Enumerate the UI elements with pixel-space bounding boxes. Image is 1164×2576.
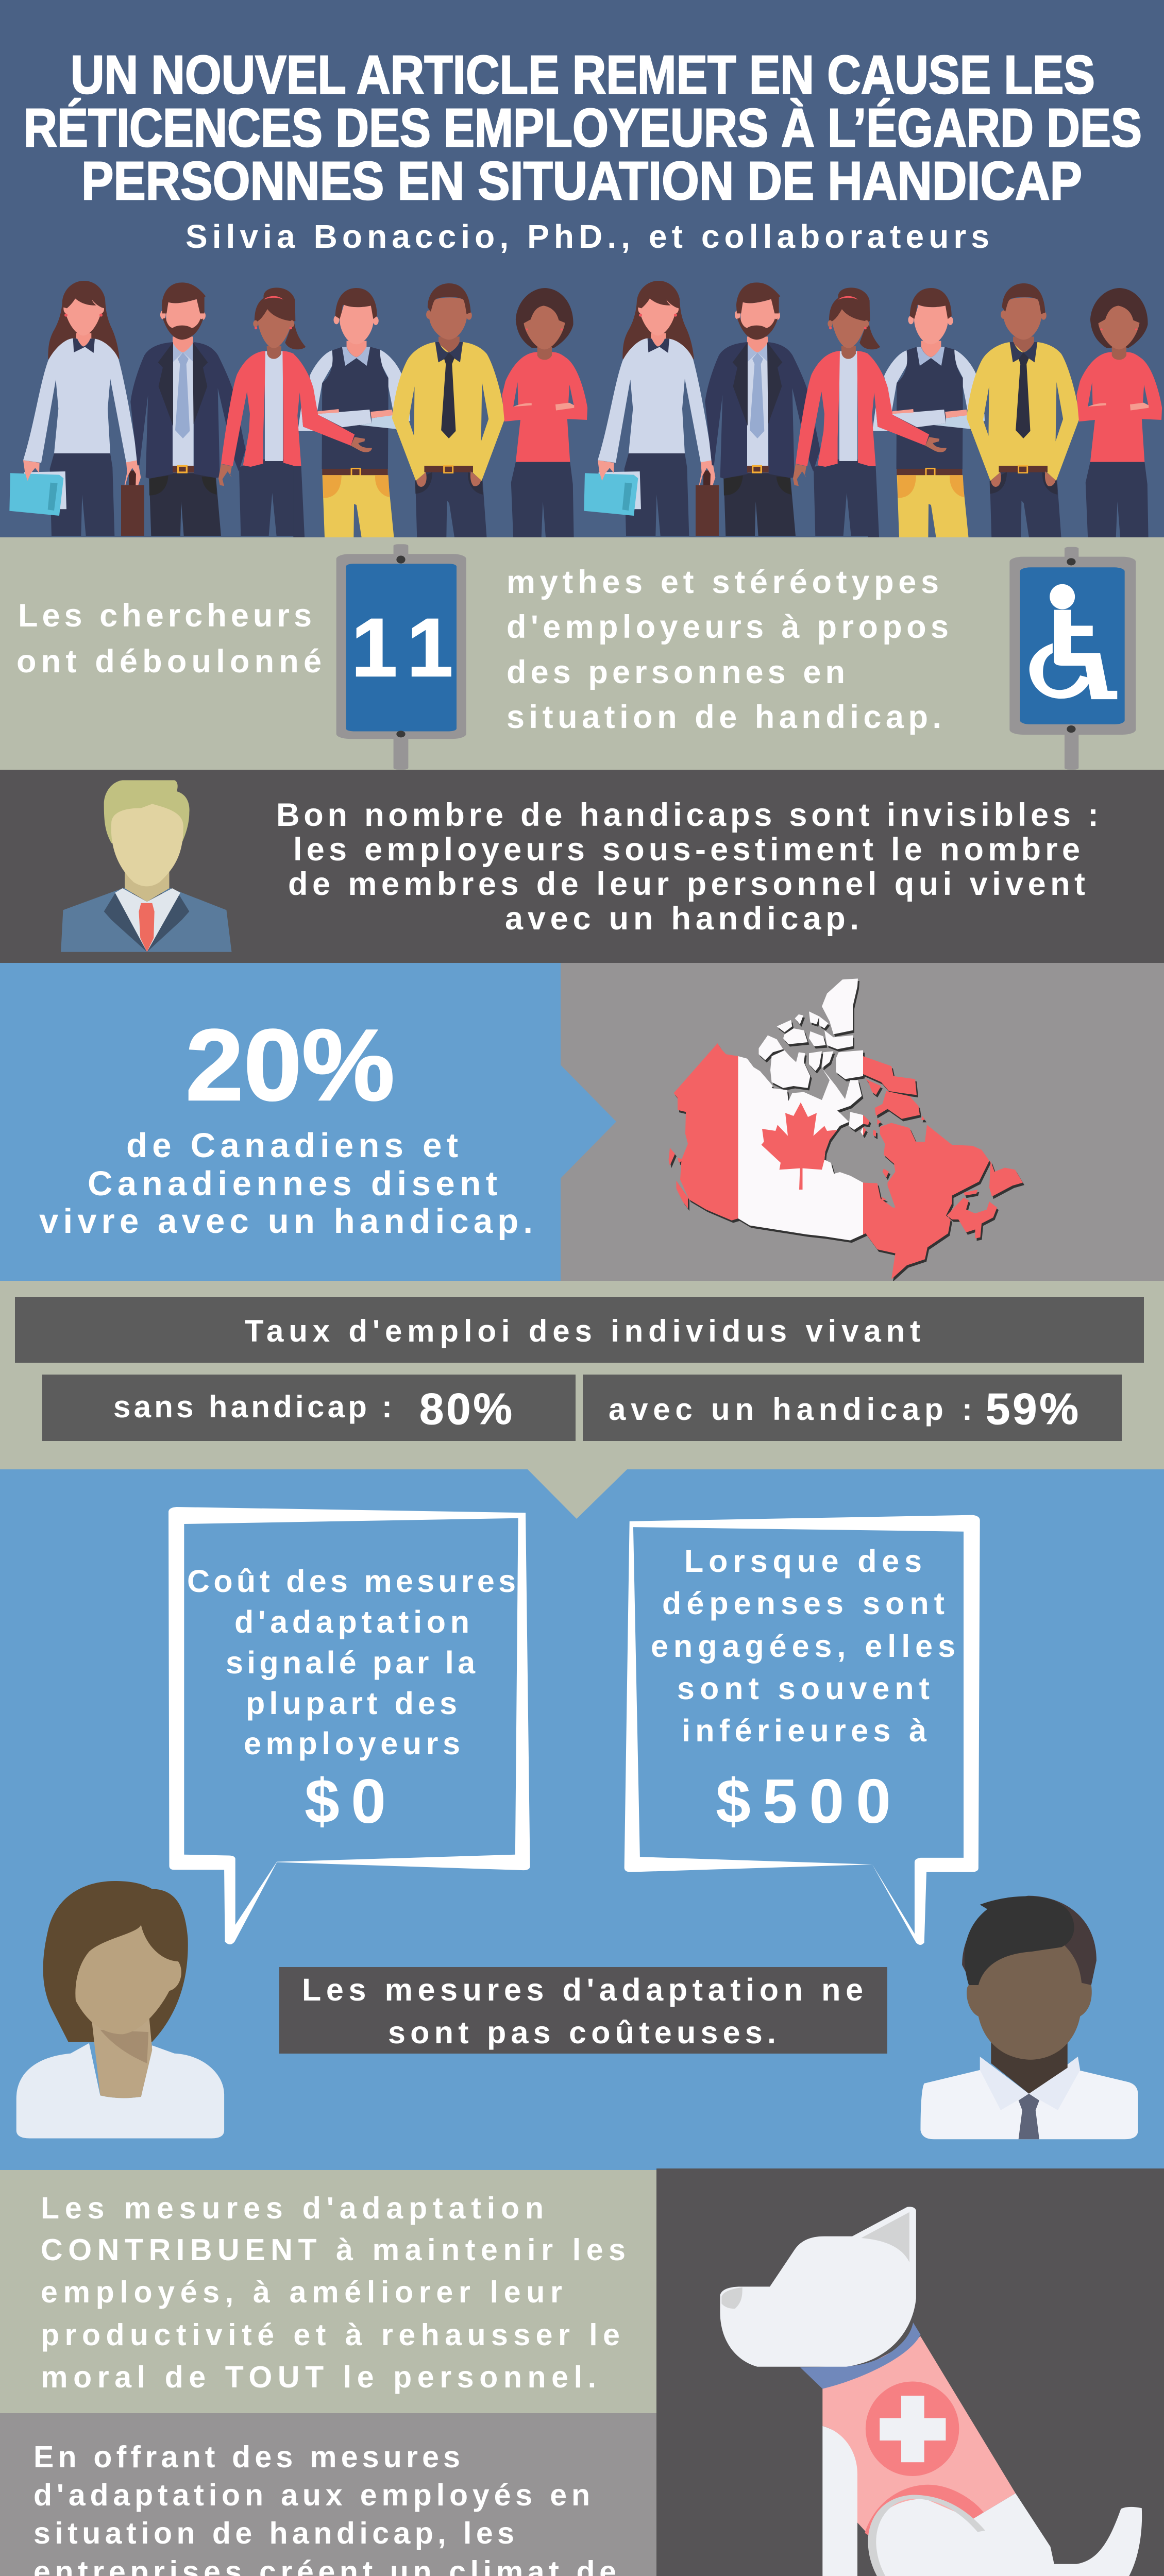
text: inclusive climate [33,2440,616,2576]
text: invisible disabilities: de membres de leur personnel qui vivent [288,866,1085,902]
text: myths and stereotypes: situation de handicap. [507,699,941,735]
text: of Canadians: de Canadiens et [126,1126,458,1165]
stat: without disability 80%: sans handicap : [113,1389,392,1424]
illustration: group of employees [9,281,1162,537]
callout: not costly [279,1967,887,2054]
stat: number 11: 11 [351,601,453,693]
panel: header [0,0,1164,537]
panel: blue arrow box [0,963,616,1281]
text: right bubble [651,1544,955,1748]
text: benefits: CONTRIBUENT à maintenir les [41,2233,626,2267]
text: right bubble: Lorsque des [684,1544,922,1579]
title [24,45,1142,211]
panel: 20 percent map [0,963,1164,1283]
text: myths and stereotypes: mythes et stéréotypes [507,564,939,600]
panel: employment rates [0,1281,1164,1469]
icon: woman [16,1881,224,2139]
text: benefits: employés, à améliorer leur [41,2275,562,2309]
callout: not costly: sont pas coûteuses. [388,2015,776,2050]
stat: with disability 59%: avec un handicap : [609,1392,972,1427]
arrow: pointer from employment panel [528,1469,627,1519]
callout: left speech bubble outline [168,1507,530,1944]
text: left bubble: plupart des [246,1686,457,1721]
callout: not costly: Les mesures d'adaptation ne [302,1972,863,2007]
panel: accommodation benefits [0,2170,656,2413]
panel: invisible disabilities [0,770,1164,963]
stat: without disability 80% [42,1375,576,1441]
text: of Canadians [39,1126,533,1241]
heading: employment rate: Taux d'emploi des individus vivant [245,1314,920,1348]
callout: right speech bubble outline [625,1515,980,1945]
icon: wheelchair road sign [1009,547,1136,770]
stat: $500: $500 [716,1766,891,1836]
text: left bubble: signalé par la [226,1645,476,1680]
text: researchers debunked: ont déboulonné [16,643,322,680]
stat: 20%: 20% [185,1008,395,1122]
text: inclusive climate: situation de handicap, les [33,2516,514,2550]
icon: map of Canada with flag [665,975,1032,1283]
text: left bubble [187,1564,516,1761]
text: right bubble: inférieures à [682,1713,927,1748]
text: researchers debunked: Les chercheurs [18,598,312,634]
text: researchers debunked [16,598,322,680]
subtitle: authors: Silvia Bonaccio, PhD., et collaborateurs [185,218,989,255]
panel: accommodation cost [0,1469,1164,2170]
text: invisible disabilities [276,797,1099,937]
text: of Canadians: Canadiennes disent [88,1164,497,1203]
text: myths and stereotypes [507,564,949,735]
text: left bubble: Coût des mesures [187,1564,516,1599]
panel: service dog [656,2168,1164,2576]
text: left bubble: d'adaptation [234,1604,469,1639]
text: invisible disabilities: les employeurs sous-estiment le nombre [293,832,1080,868]
text: inclusive climate: d'adaptation aux employés en [33,2478,590,2512]
panel: inclusive climate [0,2413,656,2576]
text: inclusive climate: En offrant des mesures [33,2440,460,2474]
icon: man [920,1896,1138,2139]
icon: service dog [720,2207,1142,2576]
text: myths and stereotypes: d'employeurs à propos [507,609,949,645]
text: of Canadians: vivre avec un handicap. [39,1202,533,1241]
stat: with disability 59% [583,1375,1122,1441]
text: myths and stereotypes: des personnes en [507,654,845,690]
text: benefits: productivité et à rehausser le [41,2318,620,2352]
panel: myths [0,537,1164,770]
heading: employment rate [15,1297,1144,1363]
text: benefits [41,2191,626,2394]
stat: $0: $0 [305,1766,386,1836]
stat: without disability 80%: 80% [419,1385,512,1434]
icon: road sign 11 background [336,544,466,770]
text: right bubble: dépenses sont [662,1586,944,1621]
text: invisible disabilities: Bon nombre de handicaps sont invisibles : [276,797,1099,833]
text: right bubble: sont souvent [677,1671,930,1706]
stat: with disability 59%: 59% [986,1385,1078,1434]
text: benefits: moral de TOUT le personnel. [41,2360,596,2394]
text: benefits: Les mesures d'adaptation [41,2191,544,2225]
text: right bubble: engagées, elles [651,1629,955,1664]
text: left bubble: employeurs [244,1726,460,1761]
icon: businessman [61,780,231,952]
text: invisible disabilities: avec un handicap. [505,901,859,937]
